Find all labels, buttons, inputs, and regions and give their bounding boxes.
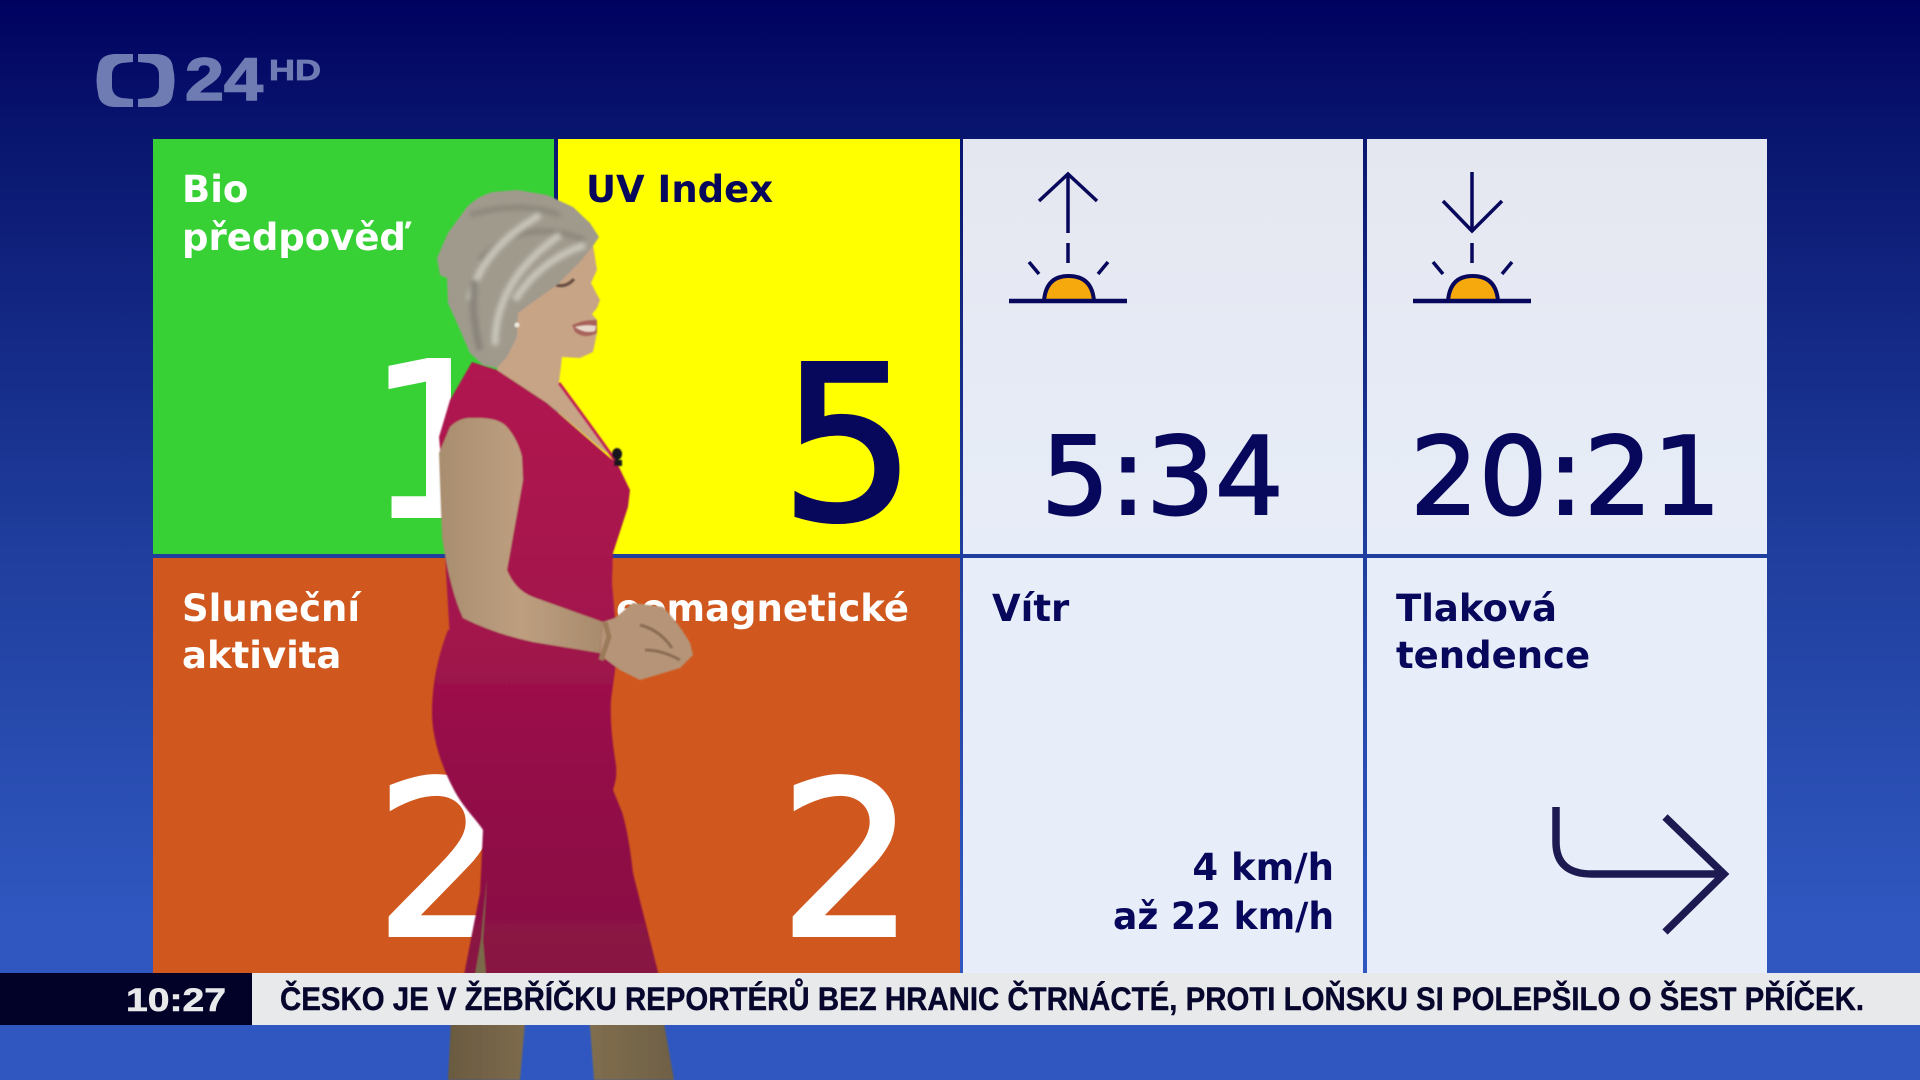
panel: Vítr (963, 558, 1363, 978)
heading: Sluneční aktivita: Sluneční (182, 587, 362, 630)
ticker headline (252, 973, 1920, 1025)
panel: Sunset (1367, 139, 1767, 554)
ticker clock box (0, 973, 252, 1025)
heading: Vítr: Vítr (992, 587, 1070, 630)
heading: UV Index: UV Index (586, 168, 773, 211)
logo: CT24 HD: 24 (185, 46, 264, 113)
icon: pressure trend arrow (1556, 807, 1724, 932)
dress bodice (439, 362, 630, 640)
panel: Tlaková tendence (1367, 558, 1767, 978)
fingers (640, 625, 680, 660)
hands (600, 603, 693, 680)
dress lapel (559, 383, 617, 463)
icon: sunset (1413, 172, 1531, 301)
heading: Bio předpověď: Bio (182, 168, 248, 211)
heading: Geomagnetické pole: Geomagnetické (586, 587, 909, 630)
panel: Bio předpověď (153, 139, 554, 567)
bracelet (601, 622, 609, 660)
clock: 10:27: 10:27 (126, 982, 226, 1018)
microphone (612, 448, 622, 466)
heading: Bio předpověď: předpověď (182, 216, 412, 259)
presenter figure (432, 190, 693, 1080)
skirt (432, 630, 660, 980)
logo: CT24 HD (96, 46, 321, 113)
skirt slit (475, 877, 487, 975)
panel: Sunrise (963, 139, 1363, 554)
value: sunset time: 20:21 (1410, 415, 1721, 540)
value: wind speed: až 22 km/h (1113, 895, 1334, 938)
panel: Sluneční aktivita (153, 558, 554, 986)
value: sunrise time: 5:34 (1041, 415, 1284, 540)
eye (556, 279, 574, 286)
neck and face (497, 245, 613, 457)
arm (439, 418, 603, 653)
lips (572, 320, 597, 336)
value: 5: 5 (780, 321, 916, 570)
value: wind speed: 4 km/h (1192, 846, 1334, 889)
news ticker (0, 973, 1920, 1025)
value: 2: 2 (779, 737, 915, 986)
heading: Sluneční aktivita: aktivita (182, 634, 341, 677)
heading: Tlaková tendence: tendence (1396, 634, 1590, 677)
value: 2: 2 (375, 737, 511, 986)
earring (514, 322, 520, 328)
hair highlights (470, 208, 585, 350)
value: 1: 1 (367, 318, 503, 567)
heading: Geomagnetické pole: pole (588, 634, 678, 677)
icon: sunrise (1009, 173, 1127, 301)
panel: Geomagnetické pole (558, 558, 960, 986)
legs (448, 1000, 674, 1080)
logo: CT24 HD: HD (269, 55, 321, 87)
hair (437, 190, 599, 368)
panel: UV Index (558, 139, 960, 570)
heading: Tlaková tendence: Tlaková (1396, 587, 1557, 630)
